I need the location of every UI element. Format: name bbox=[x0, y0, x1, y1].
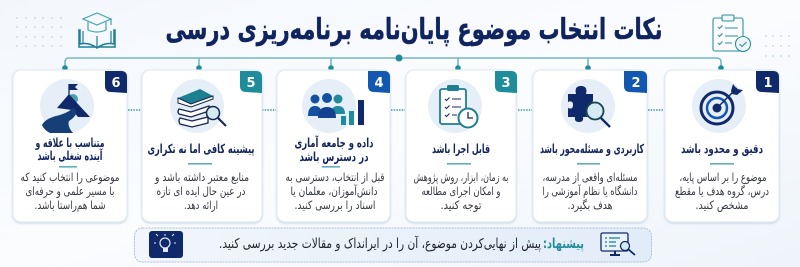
icon: target and arrow bbox=[692, 79, 746, 133]
heading: قابل اجرا باشد bbox=[432, 141, 490, 156]
icon: books and magnifier bbox=[170, 79, 226, 133]
icon: monitor with magnifier bbox=[601, 233, 635, 255]
badge 6 bbox=[105, 71, 127, 93]
icon: puzzle and magnifier bbox=[561, 79, 615, 133]
body text: موضوع را بر اساس پایه، bbox=[680, 170, 766, 185]
heading: متناسب با علاقه و bbox=[35, 135, 104, 150]
panel: card 4 bbox=[277, 70, 390, 222]
badge 1: 1 bbox=[763, 76, 773, 91]
heading: آینده شغلی باشد bbox=[38, 148, 103, 163]
panel: card 3 bbox=[406, 70, 517, 222]
badge 2 bbox=[624, 71, 647, 93]
body text: شما هم‌راستا باشد. bbox=[34, 198, 106, 213]
body text: درس، گروه هدف یا مقطع bbox=[675, 184, 769, 199]
body text: منابع معتبر داشته باشد و bbox=[154, 170, 249, 185]
body text bbox=[286, 170, 384, 213]
heading: دقیق و محدود باشد bbox=[681, 141, 763, 156]
heading: کاربردی و مسئله‌محور باشد bbox=[540, 141, 644, 156]
badge 3 bbox=[495, 71, 517, 93]
suggestion text: پیشنهاد: bbox=[543, 236, 584, 252]
panel: card 2 bbox=[533, 70, 647, 222]
icon: people and bar chart bbox=[302, 79, 364, 133]
body text: توجه کنید. bbox=[440, 198, 482, 213]
body text: به زمان، ابزار، روش پژوهش bbox=[414, 170, 508, 185]
body text: دانش‌آموزان، معلمان یا bbox=[290, 184, 378, 199]
body text bbox=[20, 170, 120, 213]
badge 5 bbox=[240, 71, 262, 93]
dashed links between cards bbox=[128, 109, 664, 111]
icon: mountain with flag bbox=[40, 79, 94, 133]
badge 5: 5 bbox=[246, 76, 256, 91]
heading: داده و جامعه آماری bbox=[294, 135, 374, 150]
panel: card 6 bbox=[13, 70, 127, 222]
connector tree bbox=[62, 54, 724, 71]
icon: book with graduation cap bbox=[79, 13, 115, 48]
body text: ارائه دهد. bbox=[184, 198, 218, 213]
icon: clipboard with check bbox=[713, 15, 750, 52]
panel: card 5 bbox=[142, 70, 262, 222]
body text: مشخص کنید. bbox=[696, 198, 748, 213]
heading: در دسترس باشد bbox=[300, 149, 368, 164]
badge 1 bbox=[756, 71, 779, 93]
heading bbox=[294, 135, 374, 164]
badge 4: 4 bbox=[374, 76, 384, 91]
badge 3: 3 bbox=[501, 76, 511, 91]
body text: با مسیر علمی و حرفه‌ای bbox=[26, 184, 114, 199]
body text bbox=[414, 170, 508, 213]
panel: suggestion bar bbox=[134, 228, 652, 262]
body text: دانشگاه یا نظام آموزشی را bbox=[542, 184, 638, 199]
badge 4 bbox=[368, 71, 390, 93]
body text: در عین حال ایده ای تازه bbox=[156, 184, 246, 199]
icon: light bulb bbox=[149, 231, 183, 258]
body text: موضوعی را انتخاب کنید که bbox=[20, 170, 120, 185]
body text bbox=[675, 170, 769, 213]
panel: card 1 bbox=[665, 70, 779, 222]
body text: هدف بگیرد. bbox=[568, 198, 612, 213]
badge 6: 6 bbox=[111, 76, 121, 91]
body text: مسئله‌ای واقعی از مدرسه، bbox=[542, 170, 638, 185]
body text bbox=[542, 170, 638, 213]
heading: پیشینه کافی اما نه تکراری bbox=[148, 141, 254, 156]
icon: checklist and clock bbox=[428, 79, 482, 133]
body text: قبل از انتخاب، دسترسی به bbox=[286, 170, 384, 185]
body text bbox=[154, 170, 249, 213]
body text: اسناد را بررسی کنید. bbox=[294, 198, 376, 213]
badge 2: 2 bbox=[631, 76, 641, 91]
body text: و امکان اجرای مطالعه bbox=[422, 184, 500, 199]
heading bbox=[35, 135, 104, 163]
suggestion text: پیش از نهایی‌کردن موضوع، آن را در ایرانداک و مقالات جدید بررسی کنید. bbox=[219, 235, 541, 252]
